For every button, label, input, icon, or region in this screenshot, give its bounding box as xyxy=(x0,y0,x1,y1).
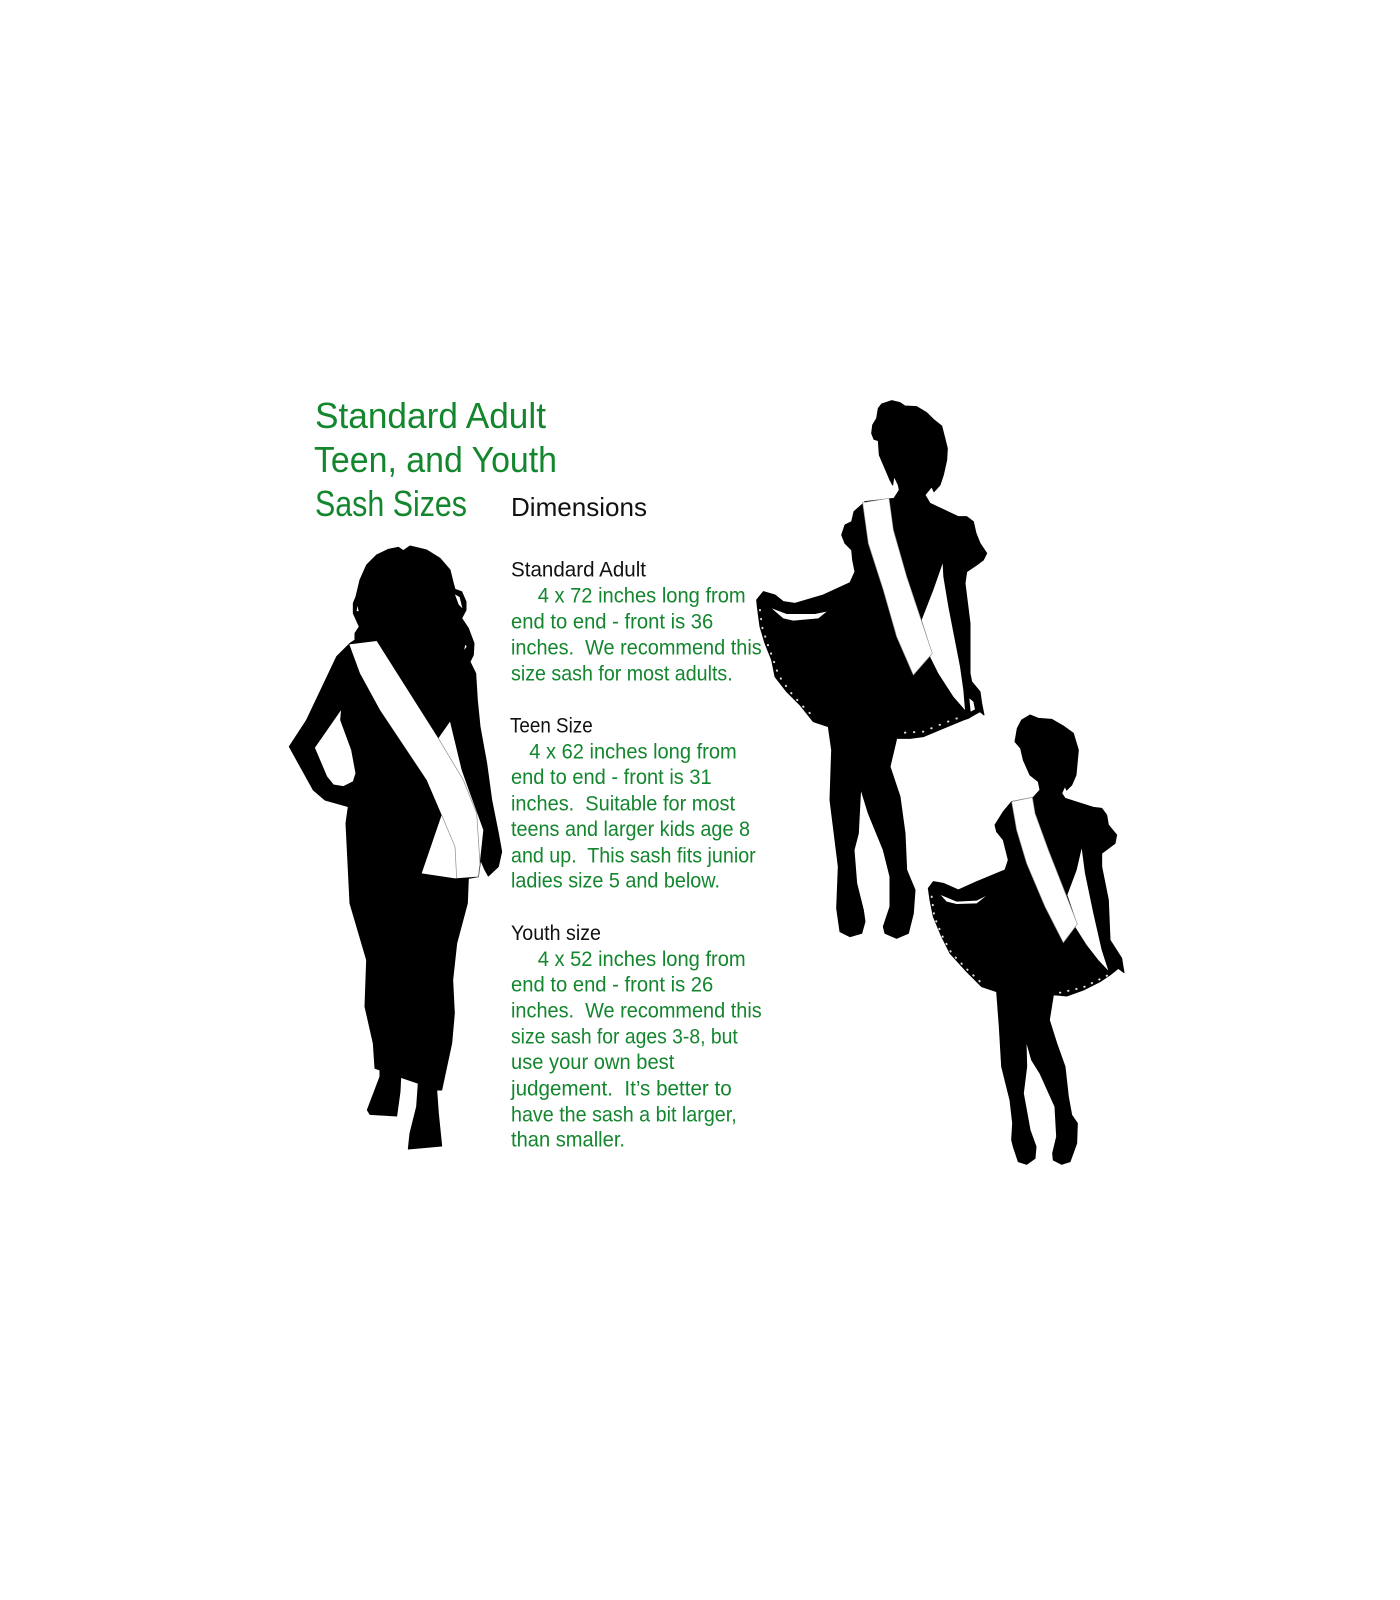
text block: teen size: ladies size 5 and below. xyxy=(511,870,720,893)
text block: youth size: size sash for ages 3-8, but xyxy=(511,1025,738,1048)
sash: youth back xyxy=(1067,848,1108,971)
text block: standard adult: size sash for most adults. xyxy=(511,663,733,686)
text block: youth size: use your own best xyxy=(511,1051,674,1074)
hem dots xyxy=(932,897,1108,993)
text block: youth size: Youth size xyxy=(511,922,601,945)
sash: adult xyxy=(349,641,483,878)
skirt lift highlight xyxy=(772,608,827,621)
figure: teen silhouette with sash xyxy=(757,401,987,938)
text block: standard adult xyxy=(511,559,762,686)
figure: adult silhouette with sash xyxy=(289,546,502,1149)
text block: teen size: and up. This sash fits junior xyxy=(511,844,756,867)
title: Standard Adult xyxy=(315,395,546,436)
text block: youth size: 4 x 52 inches long from xyxy=(538,948,746,971)
hem dots xyxy=(760,610,963,733)
sash: teen front xyxy=(863,498,932,675)
text block: standard adult: end to end - front is 36 xyxy=(511,610,713,633)
text block: youth size: end to end - front is 26 xyxy=(511,974,713,997)
text block: teen size: 4 x 62 inches long from xyxy=(529,740,737,763)
text block: teen size: teens and larger kids age 8 xyxy=(511,818,750,841)
text block: youth size: have the sash a bit larger, xyxy=(511,1104,737,1127)
text block: teen size: inches. Suitable for most xyxy=(511,793,735,816)
text block: youth size: inches. We recommend this xyxy=(511,999,762,1022)
text block: standard adult: Standard Adult xyxy=(511,559,646,582)
sash fold lines xyxy=(438,738,480,878)
hand gap xyxy=(969,698,975,712)
text block: standard adult: 4 x 72 inches long from xyxy=(538,585,746,608)
text block: teen size: Teen Size xyxy=(510,714,593,737)
text block: standard adult: inches. We recommend this xyxy=(511,636,762,659)
text block: youth size: judgement. It’s better to xyxy=(510,1078,732,1101)
text block: teen size xyxy=(510,714,756,893)
sash: youth front xyxy=(1012,797,1077,943)
figure: youth silhouette with sash xyxy=(928,715,1124,1164)
title xyxy=(314,395,557,524)
title: Sash Sizes xyxy=(315,483,467,524)
text block: youth size: than smaller. xyxy=(511,1129,625,1152)
heading: dimensions: Dimensions xyxy=(511,492,647,522)
text block: youth size xyxy=(510,922,762,1152)
sash: teen back xyxy=(922,563,965,710)
text block: teen size: end to end - front is 31 xyxy=(511,766,712,789)
skirt lift highlight xyxy=(941,895,986,904)
title: Teen, and Youth xyxy=(314,439,557,480)
